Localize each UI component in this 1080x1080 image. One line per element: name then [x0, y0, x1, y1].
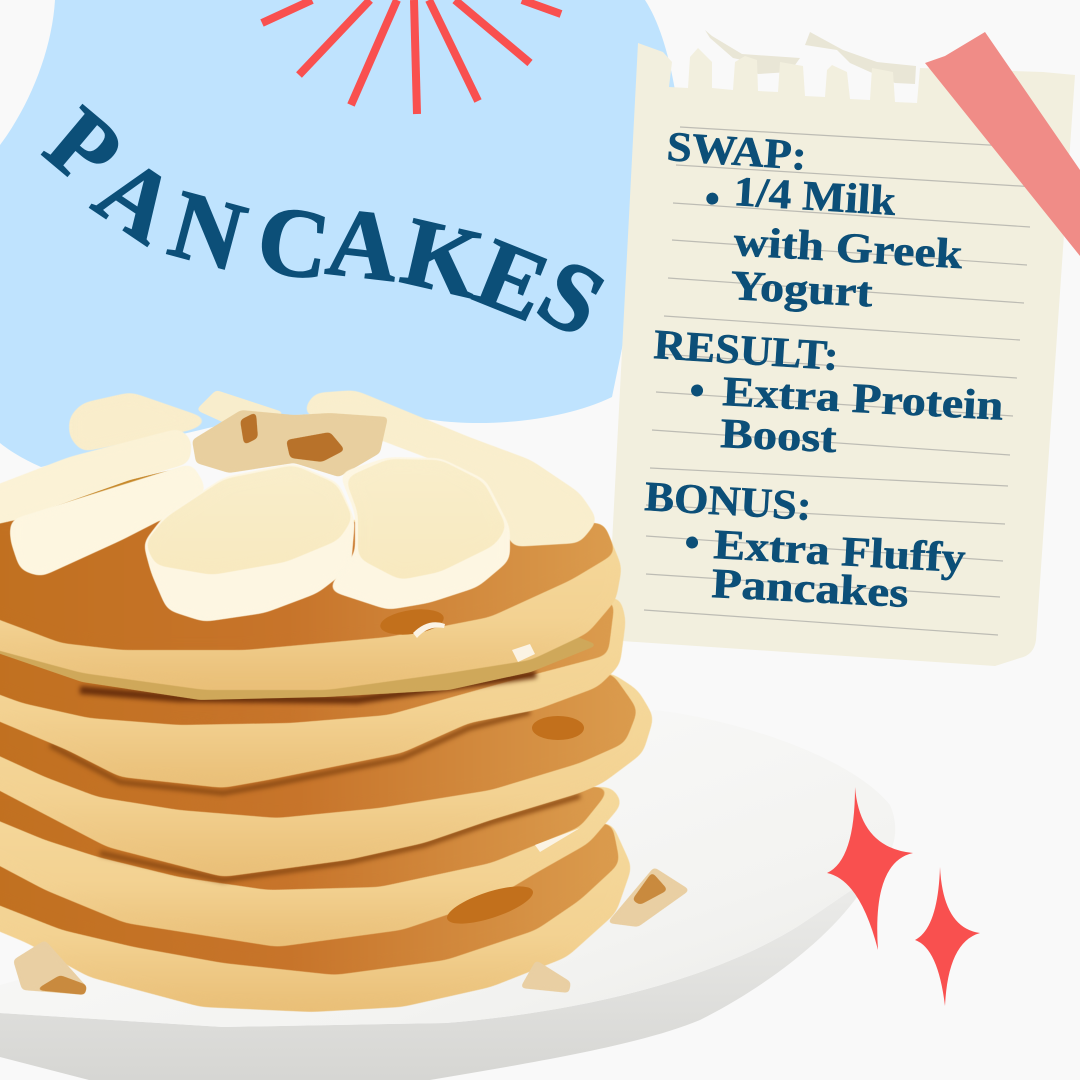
swap heading: SWAP: [665, 124, 808, 180]
banana back left [69, 392, 212, 452]
bonus item: Pancakes [710, 561, 910, 617]
syrup pools [379, 606, 584, 931]
banana back large [302, 390, 598, 547]
result item: Boost [720, 411, 837, 462]
plate [0, 710, 895, 1080]
walnut [192, 410, 388, 477]
pancake 2 [0, 597, 626, 788]
banana centre [143, 463, 355, 622]
bonus item: • [683, 520, 701, 567]
result heading: RESULT: [652, 322, 840, 380]
banana back middle [196, 390, 286, 430]
syrup under left slice [16, 465, 190, 530]
swap item: Yogurt [729, 263, 874, 316]
bonus item: Extra Fluffy [712, 522, 967, 582]
pancake 3 [0, 673, 654, 877]
banana left middle [0, 428, 192, 530]
syrup highlights [413, 622, 580, 852]
red burst [262, 0, 561, 114]
result item: • [688, 368, 706, 415]
pancake 1 [0, 515, 622, 690]
title: PANCAKES [26, 87, 622, 358]
note text [643, 124, 1004, 617]
swap item: • [703, 176, 721, 223]
sparkle small [915, 867, 980, 1006]
blue blob [0, 0, 675, 467]
swap item [703, 169, 964, 316]
bonus heading: BONUS: [643, 474, 813, 530]
crumbs [13, 867, 690, 995]
pancake stack [0, 390, 690, 1012]
bonus item [683, 520, 967, 617]
swap item: with Greek [732, 219, 964, 278]
plate top [0, 710, 895, 1027]
pancake 4 [0, 787, 623, 947]
filling under top pancake [0, 630, 598, 700]
result item [688, 368, 1004, 462]
ruled lines [644, 127, 1040, 635]
plate underside [0, 880, 868, 1080]
swap item: 1/4 Milk [732, 169, 898, 225]
result item: Extra Protein [721, 369, 1004, 430]
note paper [607, 30, 1075, 666]
pancake 5 [0, 823, 632, 1012]
sparkle large [827, 787, 913, 950]
tape [925, 32, 1080, 256]
banana left lower [10, 463, 206, 577]
banana right centre [327, 457, 510, 610]
torn pieces [705, 30, 916, 84]
